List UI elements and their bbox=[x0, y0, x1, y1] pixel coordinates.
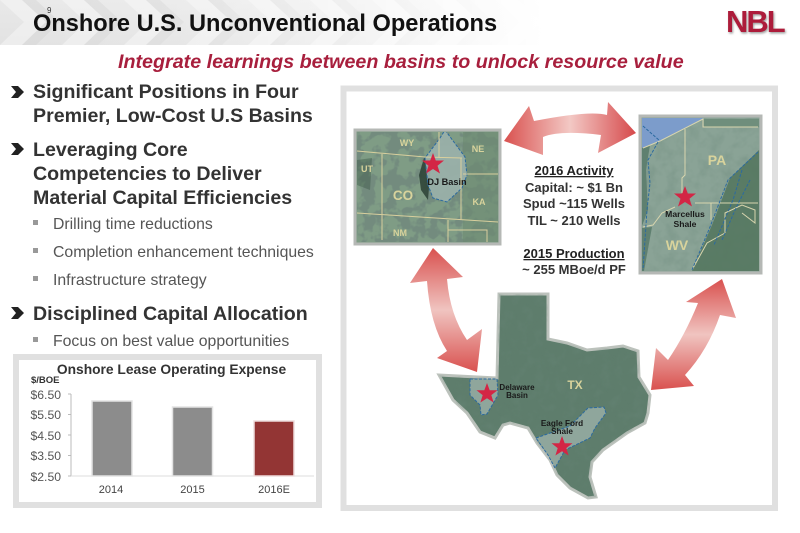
sub-bullets: efficiency items: Completion enhancement techniques bbox=[53, 244, 314, 261]
activity text: TIL ~ 210 Wells bbox=[527, 213, 621, 228]
map: Texas bbox=[435, 290, 655, 502]
activity text: 2015 Production bbox=[523, 246, 625, 261]
bullet list bbox=[11, 81, 314, 350]
bar: 2014 bbox=[92, 401, 132, 496]
map: DJ Basin bbox=[355, 130, 500, 244]
bar: 2014: 2014 bbox=[99, 484, 123, 496]
map: Marcellus Shale bbox=[640, 116, 761, 273]
arrow: Marcellus to Texas bbox=[651, 279, 736, 390]
map: Marcellus Shale: Shale bbox=[674, 219, 697, 229]
map: DJ Basin: CO bbox=[393, 188, 413, 203]
arrow: DJ to Delaware bbox=[410, 248, 482, 372]
map: DJ Basin: DJ Basin bbox=[427, 177, 467, 187]
map: DJ Basin: UT bbox=[361, 164, 373, 174]
panel: lease operating expense chart bbox=[16, 357, 319, 505]
bullet: leveraging core competencies: Material Capital Efficiencies bbox=[33, 187, 292, 209]
map: Texas: Shale bbox=[551, 427, 573, 436]
y axis: $4.50 bbox=[30, 429, 61, 443]
y axis: $5.50 bbox=[30, 408, 61, 422]
bar: 2016E: 2016E bbox=[258, 484, 290, 496]
y axis: $2.50 bbox=[30, 470, 61, 484]
bullet: leveraging core competencies: Competencies to Deliver bbox=[33, 163, 262, 185]
star: DJ Basin bbox=[422, 153, 444, 174]
map: DJ Basin: WY bbox=[400, 138, 414, 148]
star: Delaware Basin bbox=[476, 383, 498, 402]
map: DJ Basin: NE bbox=[472, 144, 484, 154]
arrow: DJ to Marcellus bbox=[504, 102, 636, 155]
map: Marcellus Shale: WV bbox=[666, 237, 689, 253]
bullet: significant positions: Significant Positions in Four bbox=[33, 81, 299, 103]
logo: NBL: NBL bbox=[726, 4, 785, 39]
activity text: 2016 Activity bbox=[534, 163, 614, 178]
map: Texas: Eagle Ford bbox=[541, 419, 583, 428]
activity text: Spud ~115 Wells bbox=[523, 196, 625, 211]
activity text: ~ 255 MBoe/d PF bbox=[522, 262, 626, 277]
title: Onshore U.S. Unconventional Operations bbox=[33, 11, 497, 37]
x axis line bbox=[71, 475, 314, 477]
chart title: Onshore Lease Operating Expense bbox=[57, 362, 286, 377]
y axis: $3.50 bbox=[30, 449, 61, 463]
axis unit: $/BOE bbox=[31, 375, 60, 386]
bar: 2016E bbox=[254, 421, 294, 496]
sub-bullets: efficiency items: Infrastructure strategy bbox=[53, 272, 207, 289]
y axis bbox=[30, 388, 71, 484]
bar: 2015: 2015 bbox=[180, 484, 205, 496]
map: Texas: TX bbox=[567, 378, 583, 392]
activity text: Capital: ~ $1 Bn bbox=[525, 180, 623, 195]
map: DJ Basin: NM bbox=[393, 228, 407, 238]
sub-bullet: focus: Focus on best value opportunities bbox=[53, 333, 289, 350]
map: Texas: Basin bbox=[506, 391, 528, 400]
header band bbox=[0, 0, 800, 45]
map: Marcellus Shale: Marcellus bbox=[665, 209, 705, 219]
slide number: 9 bbox=[47, 6, 52, 15]
bar: 2015 bbox=[172, 407, 212, 496]
map: Texas: Delaware bbox=[499, 383, 535, 392]
activity text bbox=[522, 163, 626, 277]
bullet: significant positions bbox=[11, 81, 313, 127]
map: DJ Basin: KA bbox=[472, 197, 486, 207]
y axis: $6.50 bbox=[30, 388, 61, 402]
map: Marcellus Shale: PA bbox=[708, 152, 726, 168]
sub-bullets: efficiency items: Drilling time reductions bbox=[53, 216, 213, 233]
star: Eagle Ford bbox=[552, 436, 572, 456]
panel: basin maps bbox=[344, 88, 775, 508]
star: Marcellus bbox=[674, 186, 696, 206]
subtitle: Integrate learnings between basins to unlock resource value bbox=[118, 51, 684, 73]
bullet: leveraging core competencies: Leveraging Core bbox=[33, 139, 188, 161]
bullet: leveraging core competencies bbox=[11, 139, 292, 209]
sub-bullets: efficiency items bbox=[33, 216, 314, 289]
bullet: disciplined capital allocation: Disciplined Capital Allocation bbox=[33, 303, 308, 325]
bullet: significant positions: Premier, Low-Cost U.S Basins bbox=[33, 105, 313, 127]
